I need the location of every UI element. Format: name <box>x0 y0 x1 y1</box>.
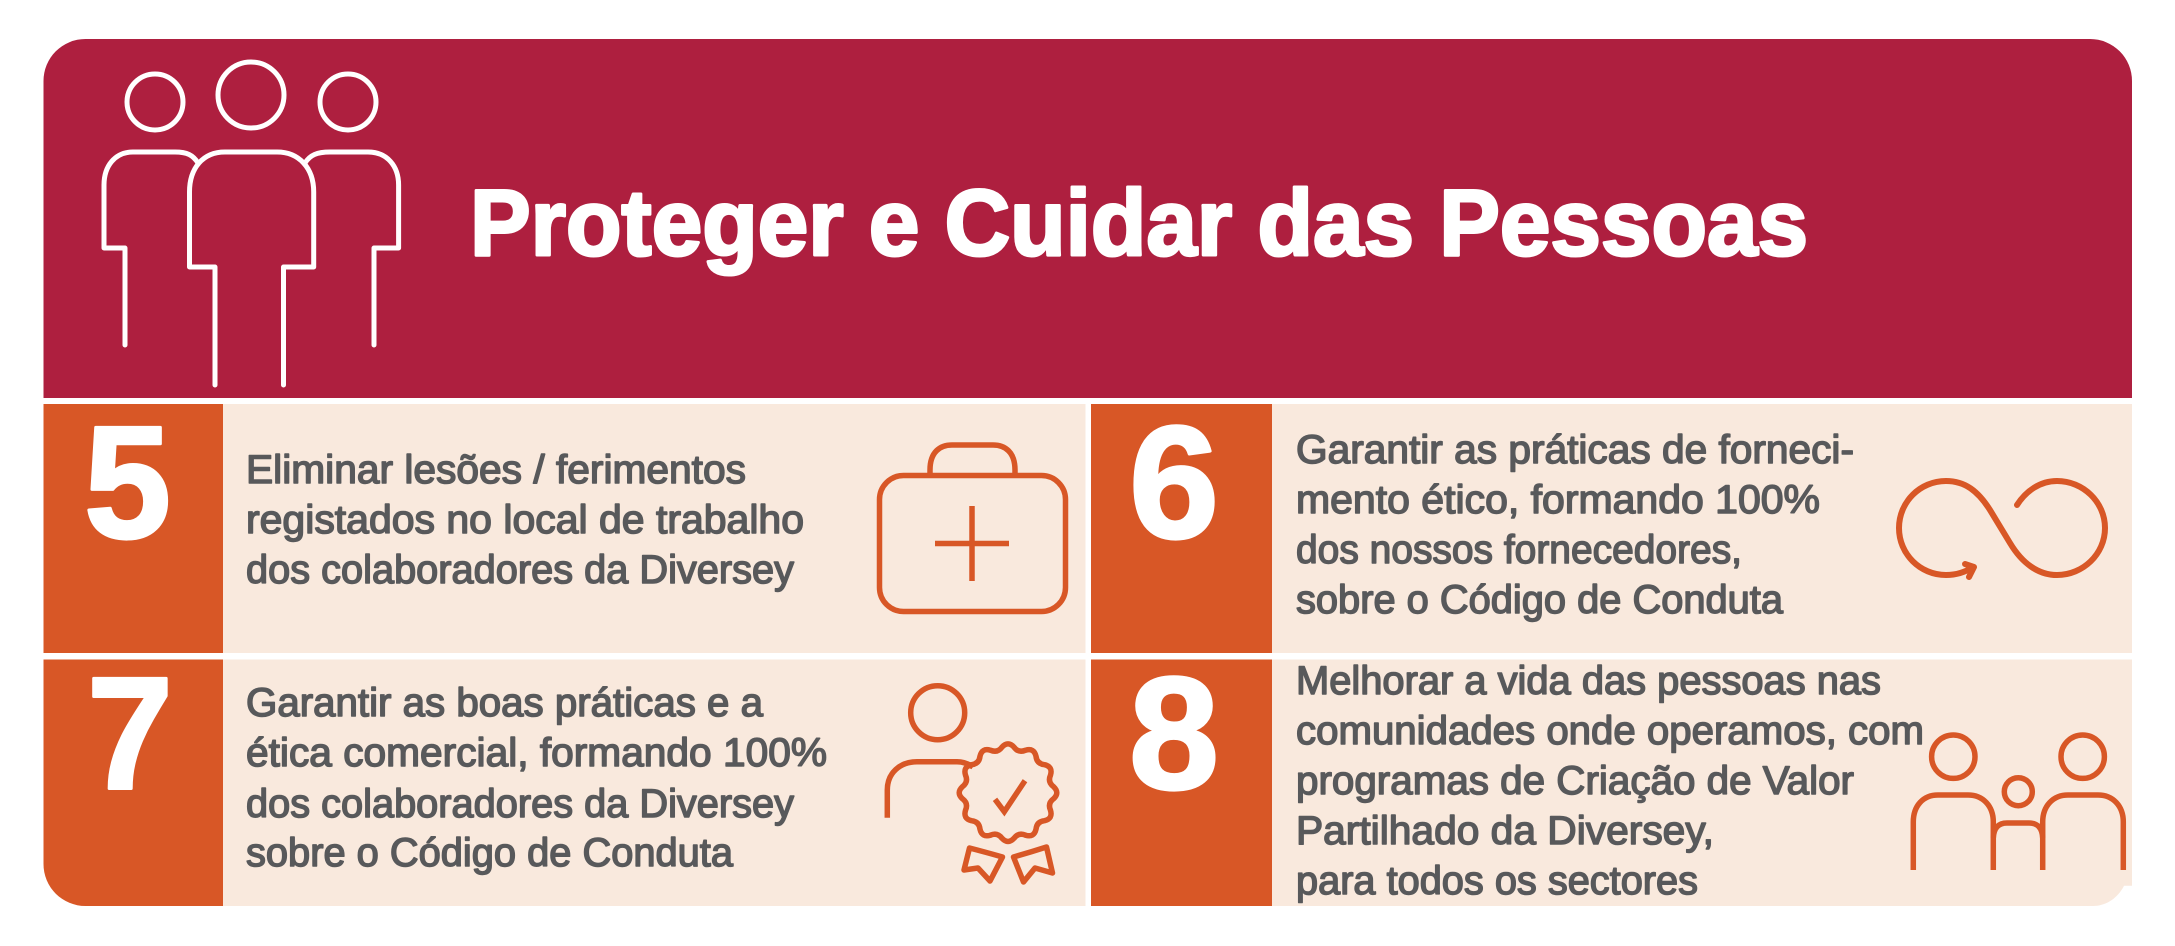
icon: three people <box>104 62 399 385</box>
text: item 6: mento ético, formando 100% <box>1296 478 1820 522</box>
text: item 6: Garantir as práticas de forneci- <box>1296 428 1854 472</box>
panel: item 6 <box>1091 392 2132 653</box>
text: item 7: Garantir as boas práticas e a <box>246 681 764 725</box>
text: item 7: sobre o Código de Conduta <box>246 831 734 875</box>
text: item 8: para todos os sectores <box>1296 859 1698 903</box>
panel: item 5 <box>44 392 1086 653</box>
text: item 7: ética comercial, formando 100% <box>246 731 827 775</box>
number 7: 7 <box>87 644 173 822</box>
text: item 5: dos colaboradores da Diversey <box>246 548 794 592</box>
text: item 6: dos nossos fornecedores, <box>1296 528 1742 572</box>
icon: infinity loop arrow <box>1899 481 2105 577</box>
text: item 6: sobre o Código de Conduta <box>1296 578 1784 622</box>
text: item 7: dos colaboradores da Diversey <box>246 782 794 826</box>
title: Proteger e Cuidar das Pessoas <box>470 170 1808 275</box>
text: item 8: programas de Criação de Valor <box>1296 759 1854 803</box>
text: item 7 <box>246 681 827 875</box>
panel: item 8 <box>1091 644 2132 906</box>
text: item 8 <box>1296 659 1924 903</box>
icon: person with award seal <box>887 686 1057 882</box>
text: item 8: Melhorar a vida das pessoas nas <box>1296 659 1881 703</box>
text: item 5 <box>246 448 804 592</box>
icon: family <box>1913 735 2123 870</box>
number 5: 5 <box>84 392 171 572</box>
panel: item 7 <box>44 644 1086 906</box>
number 6: 6 <box>1129 392 1219 572</box>
icon: first aid kit <box>880 445 1066 612</box>
text: item 5: Eliminar lesões / ferimentos <box>246 448 746 492</box>
panel: header <box>44 39 2132 398</box>
text: item 5: registados no local de trabalho <box>246 498 804 542</box>
text: item 6 <box>1296 428 1854 622</box>
number 8: 8 <box>1129 644 1219 822</box>
text: item 8: Partilhado da Diversey, <box>1296 809 1714 853</box>
text: item 8: comunidades onde operamos, com <box>1296 709 1924 753</box>
